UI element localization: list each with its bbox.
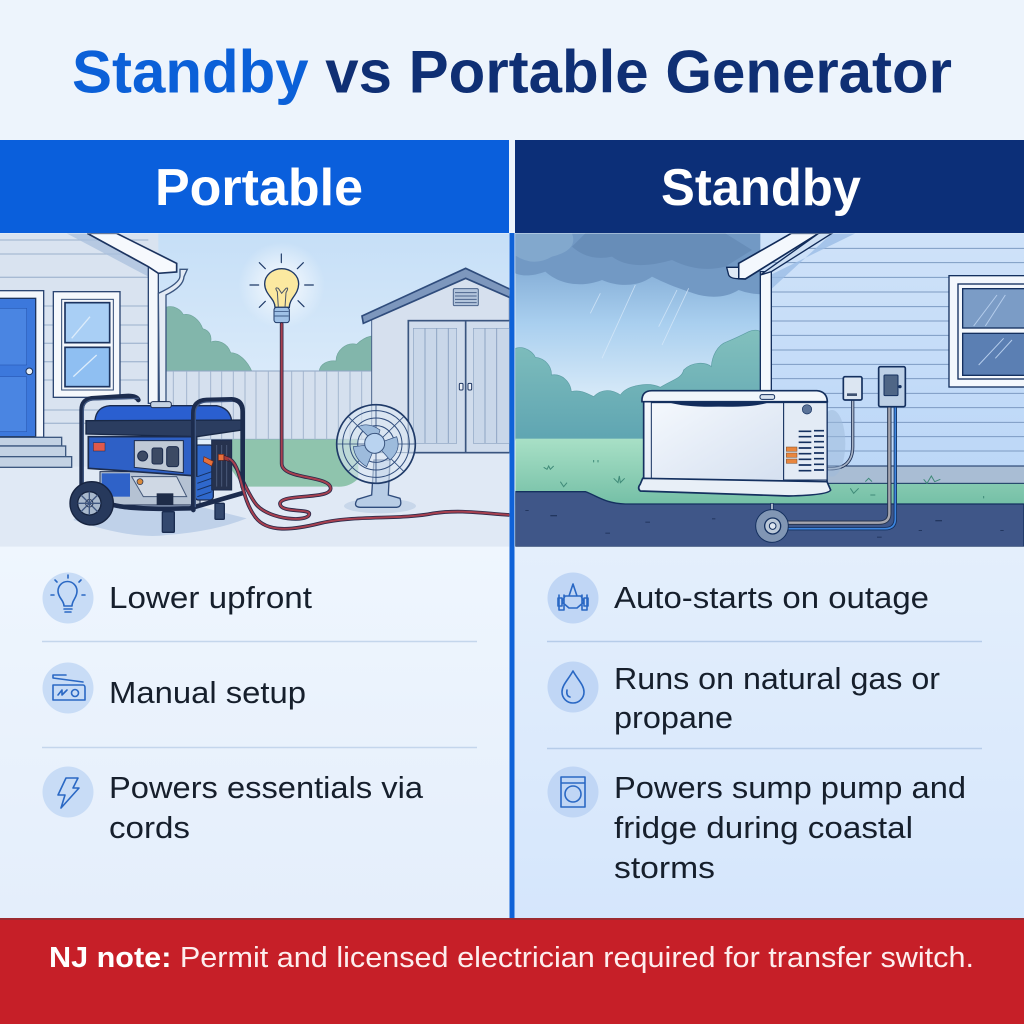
tube frame	[82, 396, 243, 510]
panel	[88, 437, 197, 476]
roof	[87, 233, 177, 273]
center divider	[510, 233, 514, 918]
door	[0, 291, 44, 437]
transfer switch	[879, 367, 905, 407]
item: sump pump: fridge during coastal	[614, 810, 913, 845]
icon: washing machine	[548, 766, 598, 818]
shed	[362, 268, 512, 453]
gas valve	[756, 503, 788, 542]
icon: water drop	[548, 662, 598, 712]
portable header	[0, 140, 509, 233]
house wall	[760, 233, 1024, 483]
wheel	[70, 482, 113, 525]
item: auto-starts	[548, 572, 929, 624]
tank	[94, 405, 232, 420]
panel: standby benefits	[514, 547, 1024, 918]
frame band	[86, 420, 242, 437]
item: lower upfront: Lower upfront	[109, 580, 312, 615]
window	[53, 292, 120, 397]
illustration: standby generator beside house	[512, 233, 1024, 547]
grass	[515, 439, 1024, 505]
item: manual setup: Manual setup	[109, 675, 306, 710]
plugs	[203, 457, 213, 466]
generator	[70, 396, 247, 536]
panel: portable	[0, 140, 512, 547]
item: sump pump: Powers sump pump and	[614, 770, 966, 805]
grass tufts	[544, 460, 984, 498]
steps	[0, 437, 72, 467]
icon: lightning bolt	[42, 766, 94, 818]
ground	[0, 469, 509, 546]
item: powers essentials: cords	[109, 810, 190, 845]
item: manual setup	[42, 662, 306, 714]
item: powers essentials	[42, 766, 424, 845]
item: fuel: Runs on natural gas or	[614, 661, 940, 696]
outlet box	[843, 377, 862, 400]
house wall	[0, 233, 158, 467]
window	[949, 276, 1024, 387]
downspout	[158, 269, 187, 402]
legs	[162, 512, 174, 532]
item: sump pump	[548, 766, 966, 885]
corner board	[760, 272, 771, 395]
panel: portable benefits	[0, 547, 510, 918]
standby header	[515, 140, 1024, 233]
standby header: Standby	[661, 159, 861, 217]
panel: standby	[512, 140, 1024, 547]
title: Standby vs Portable Generator	[72, 38, 952, 106]
item: auto-starts: Auto-starts on outage	[614, 580, 929, 615]
item: fuel	[548, 661, 940, 735]
bulb	[250, 254, 313, 323]
corner board	[148, 267, 158, 403]
trees	[515, 330, 760, 440]
rain	[590, 285, 689, 358]
footer: NJ note: NJ note: Permit and licensed electrician required for transfer switch.	[49, 942, 974, 974]
conduit and boxes	[785, 398, 895, 529]
icon: valve	[548, 572, 598, 624]
item: sump pump: storms	[614, 850, 715, 885]
engine	[100, 472, 200, 505]
item: lower upfront	[42, 572, 312, 624]
standby generator	[639, 391, 845, 496]
soil	[515, 492, 1024, 547]
portable header: Portable	[155, 159, 363, 217]
grass	[232, 439, 358, 487]
item: fuel: propane	[614, 700, 733, 735]
clouds	[512, 233, 779, 297]
roof	[739, 233, 819, 279]
fence	[166, 371, 373, 439]
icon: generator control	[42, 662, 94, 714]
long cord	[228, 458, 510, 529]
fan	[337, 405, 416, 513]
trees	[166, 307, 372, 372]
footer: NJ note	[0, 918, 1024, 1024]
illustration: portable generator in backyard	[0, 233, 512, 547]
icon: light bulb	[42, 572, 94, 624]
cord to bulb	[230, 324, 331, 519]
item: powers essentials: Powers essentials via	[109, 770, 424, 805]
